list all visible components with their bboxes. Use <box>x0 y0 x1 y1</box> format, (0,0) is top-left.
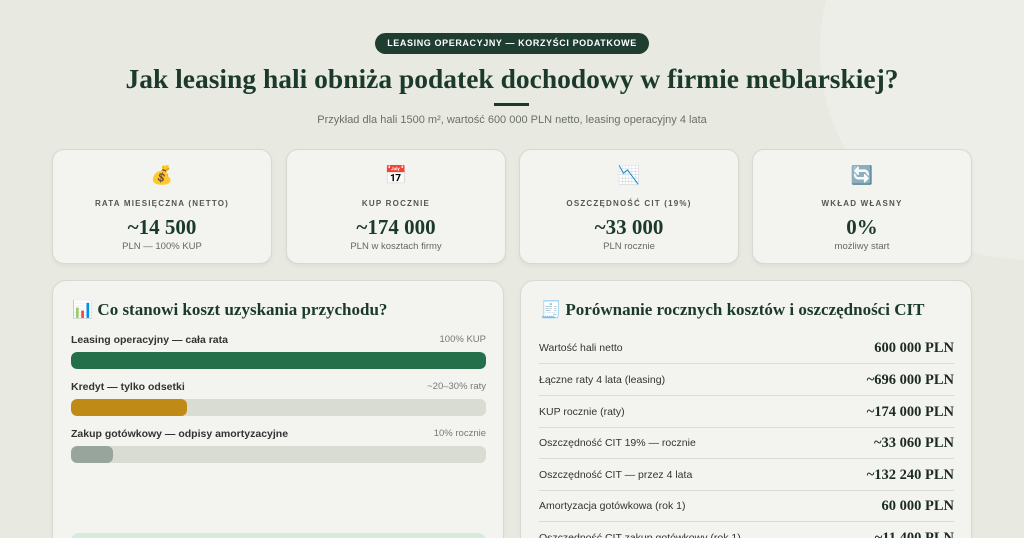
table rows: Amortyzacja gotówkowa (rok 1) <box>539 500 685 512</box>
card: rata: 💰 <box>151 165 173 185</box>
table heading: 🧾 Porównanie rocznych kosztów i oszczędności CIT <box>540 300 924 319</box>
bar zakup <box>71 446 486 463</box>
title: Jak leasing hali obniża podatek dochodowy w firmie meblarskiej? <box>125 63 899 94</box>
card: rata: ~14 500 <box>128 215 196 239</box>
card: rata: PLN — 100% KUP <box>122 241 202 252</box>
card: CIT <box>519 149 739 264</box>
table rows: ~33 060 PLN <box>874 435 954 451</box>
table rows: Łączne raty 4 lata (leasing) <box>539 374 665 386</box>
panel: table <box>520 280 972 538</box>
table rows: KUP rocznie (raty) <box>539 406 625 418</box>
pill badge <box>375 33 649 54</box>
bar label kredyt: ~20–30% raty <box>427 381 486 392</box>
card: wkład <box>752 149 972 264</box>
table rows: 600 000 PLN <box>874 340 954 356</box>
card: rata <box>52 149 272 264</box>
bar label leasing <box>71 334 486 346</box>
card: KUP: 📅 <box>385 165 407 185</box>
table rows: ~132 240 PLN <box>867 467 954 483</box>
card: KUP <box>286 149 506 264</box>
table rows: ~696 000 PLN <box>867 372 954 388</box>
bar label zakup: Zakup gotówkowy — odpisy amortyzacyjne <box>71 428 288 440</box>
table rows: ~174 000 PLN <box>867 404 954 420</box>
table rows: Oszczędność CIT 19% — rocznie <box>539 437 696 449</box>
note box <box>71 533 486 538</box>
bar label leasing: Leasing operacyjny — cała rata <box>71 334 228 346</box>
bar label leasing: 100% KUP <box>440 334 486 345</box>
card: wkład: 🔄 <box>851 165 873 185</box>
card: wkład: WKŁAD WŁASNY <box>821 199 903 208</box>
table rows: Wartość hali netto <box>539 342 623 354</box>
subtitle: Przykład dla hali 1500 m², wartość 600 000 PLN netto, leasing operacyjny 4 lata <box>317 114 707 126</box>
card: KUP: PLN w kosztach firmy <box>350 241 442 252</box>
bar label zakup: 10% rocznie <box>434 428 486 439</box>
card: CIT: PLN rocznie <box>603 241 655 252</box>
card: CIT: ~33 000 <box>595 215 663 239</box>
bar label kredyt <box>71 381 486 393</box>
pill badge: LEASING OPERACYJNY — KORZYŚCI PODATKOWE <box>387 38 637 48</box>
card: KUP: KUP ROCZNIE <box>362 199 430 208</box>
bar kredyt <box>71 399 486 416</box>
bar label zakup <box>71 428 486 440</box>
card: wkład: możliwy start <box>835 241 889 252</box>
card: CIT: OSZCZĘDNOŚĆ CIT (19%) <box>566 199 692 208</box>
card: wkład: 0% <box>846 215 878 239</box>
bar label kredyt: Kredyt — tylko odsetki <box>71 381 185 393</box>
panel heading: 📊 Co stanowi koszt uzyskania przychodu? <box>72 300 387 319</box>
card: KUP: ~174 000 <box>356 215 436 239</box>
table rows: Oszczędność CIT — przez 4 lata <box>539 469 692 481</box>
table rows <box>539 340 954 538</box>
panel: KUP bars <box>52 280 504 538</box>
bar leasing <box>71 352 486 369</box>
card: CIT: 📉 <box>618 165 640 185</box>
card: rata: RATA MIESIĘCZNA (NETTO) <box>95 199 229 208</box>
table rows: 60 000 PLN <box>882 498 954 514</box>
